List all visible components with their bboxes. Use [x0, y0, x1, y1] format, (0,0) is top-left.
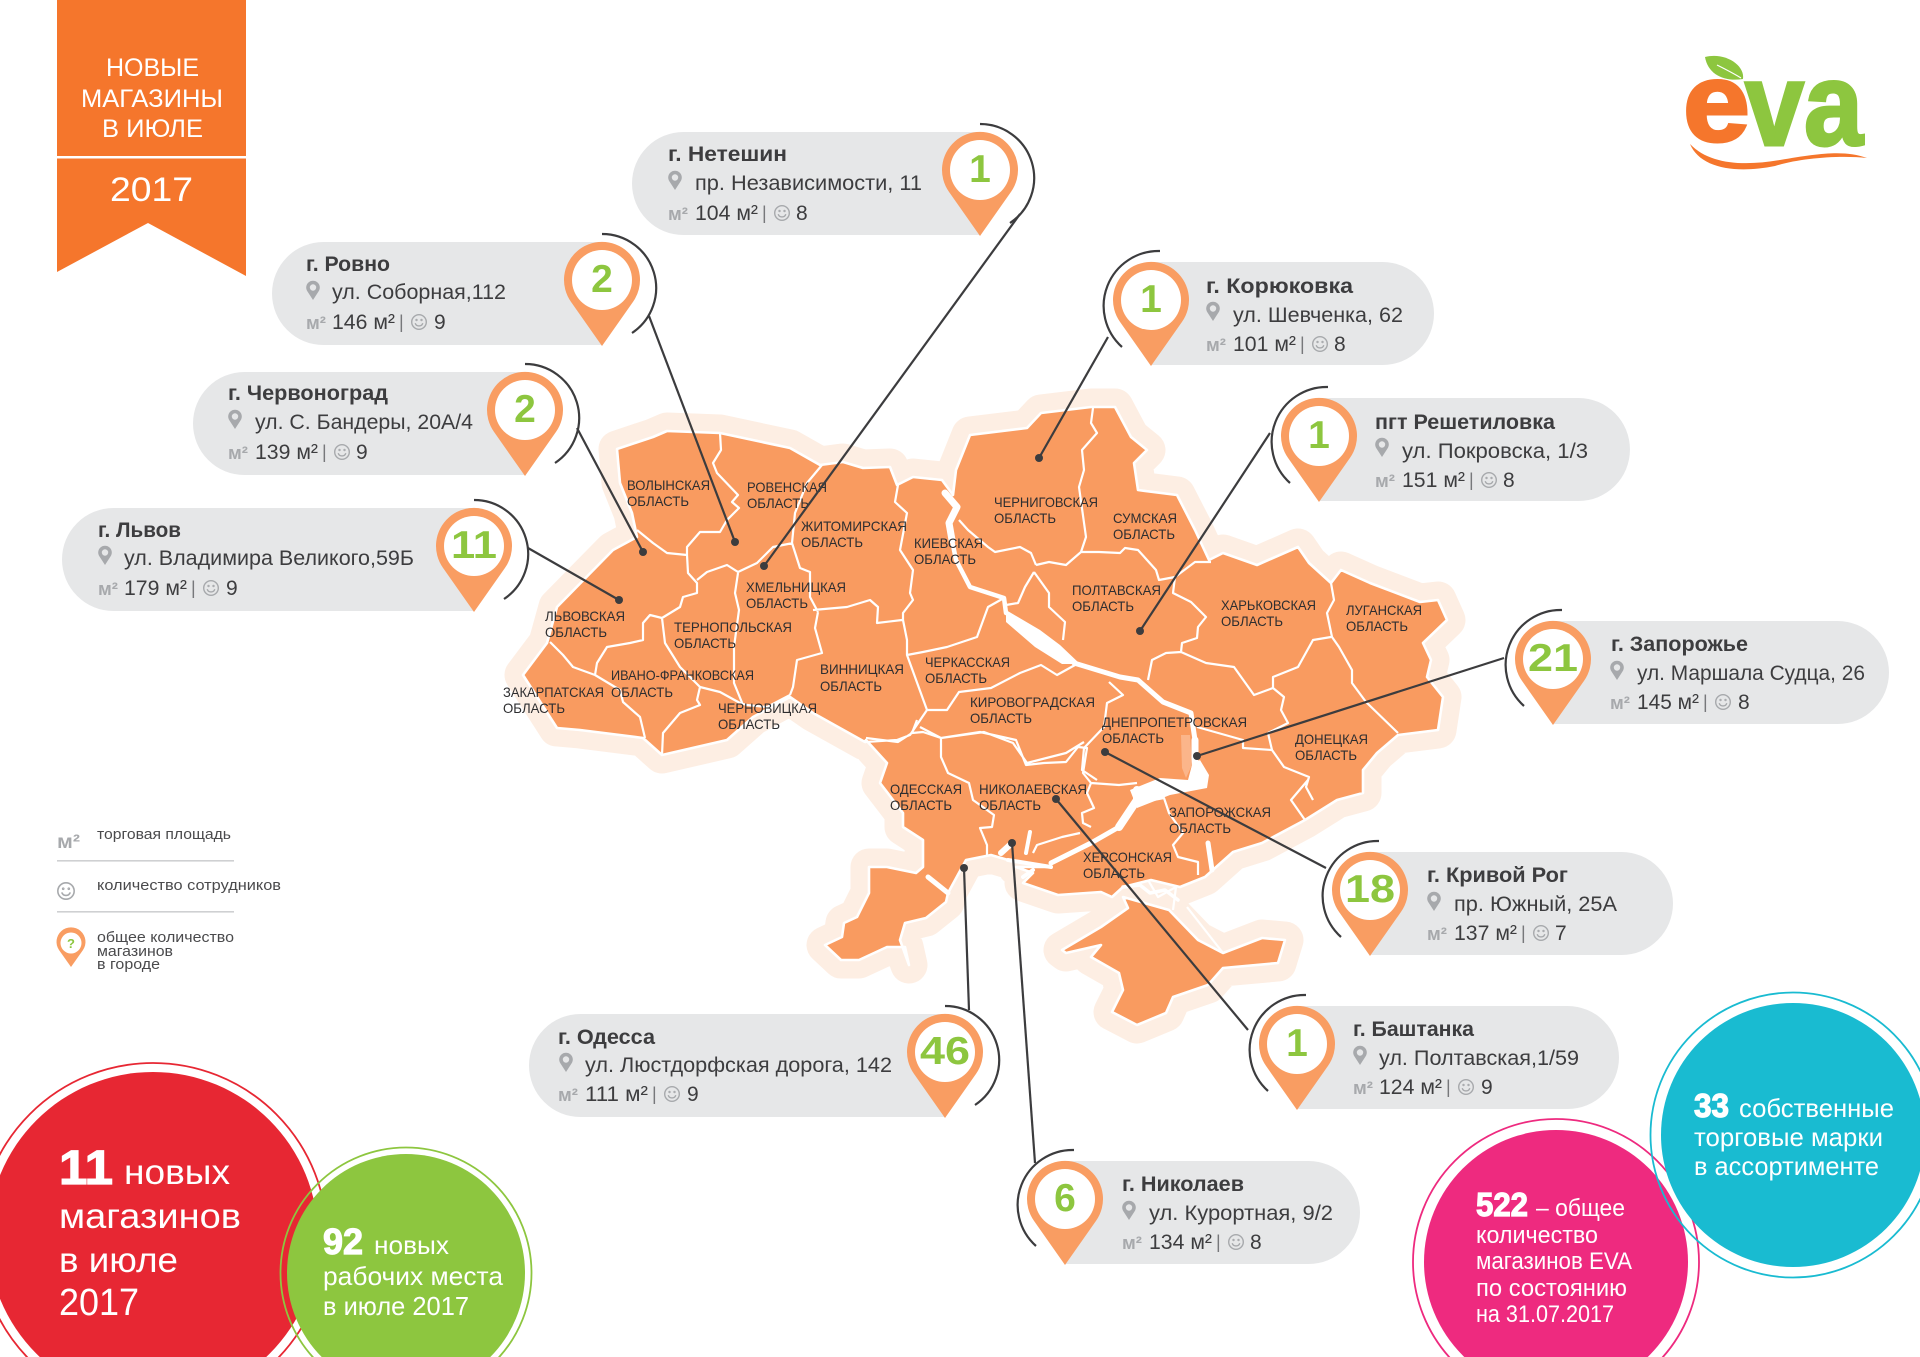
card: г. Николаев: |	[1216, 1232, 1221, 1252]
label: Закарпатская	[503, 684, 604, 716]
card: пгт Решетиловка	[1272, 387, 1630, 502]
label: Тернопольская: ТЕРНОПОЛЬСКАЯ	[674, 619, 792, 635]
label: Херсонская: ХЕРСОНСКАЯ	[1083, 849, 1172, 865]
legend: stores: магазинов	[97, 943, 173, 960]
label: Ивано-Франковская: ОБЛАСТЬ	[611, 684, 673, 700]
card: г. Корюковка: г. Корюковка	[1206, 275, 1353, 298]
label: Ровенская: ОБЛАСТЬ	[747, 495, 809, 511]
card: г. Ровно	[272, 234, 656, 346]
label: Винницкая: ОБЛАСТЬ	[820, 678, 882, 694]
legend: staff: количество сотрудников	[97, 877, 281, 894]
card: г. Одесса: |	[652, 1084, 657, 1104]
card: г. Корюковка: 101 м²	[1233, 333, 1296, 356]
oblast borders	[550, 408, 1398, 953]
circle: 33 own brands	[1650, 992, 1920, 1278]
card: г. Львов	[62, 500, 528, 612]
legend: stores: ?	[67, 936, 75, 951]
card: г. Баштанка: 9	[1481, 1076, 1493, 1099]
legend: area: м²	[57, 832, 80, 853]
card: г. Нетешин	[632, 124, 1034, 236]
circle: 33 own brands: собственные	[1739, 1093, 1894, 1123]
label: Днепропетровская: ОБЛАСТЬ	[1102, 730, 1164, 746]
label: Хмельницкая: ОБЛАСТЬ	[746, 595, 808, 611]
label: Кировоградская: КИРОВОГРАДСКАЯ	[970, 694, 1095, 710]
card: г. Червоноград	[193, 364, 579, 476]
card: г. Одесса: 9	[687, 1083, 699, 1106]
card: г. Одесса: г. Одесса	[558, 1026, 655, 1049]
label: Житомирская: ОБЛАСТЬ	[801, 534, 863, 550]
card: г. Нетешин: пр. Независимости, 11	[695, 172, 922, 195]
card: г. Запорожье: 21	[1528, 637, 1578, 680]
ribbon: title banner: В ИЮЛЕ	[102, 115, 203, 143]
label: Киевская: ОБЛАСТЬ	[914, 551, 976, 567]
legend: staff	[58, 877, 281, 899]
circle: 522 stores total: 522	[1476, 1186, 1528, 1223]
card: г. Кривой Рог: пр. Южный, 25А	[1454, 893, 1617, 916]
label: Хмельницкая	[746, 579, 846, 611]
card: г. Запорожье	[1506, 610, 1889, 725]
label: Николаевская: ОБЛАСТЬ	[979, 797, 1041, 813]
label: Закарпатская: ОБЛАСТЬ	[503, 700, 565, 716]
circle: 92 new jobs: 92	[323, 1221, 363, 1262]
circle: 522 stores total: по состоянию	[1476, 1275, 1627, 1302]
card: г. Кривой Рог: 7	[1555, 922, 1567, 945]
label: Ивано-Франковская: ИВАНО-ФРАНКОВСКАЯ	[611, 667, 754, 683]
reservoirs filled	[1006, 610, 1209, 808]
card: г. Корюковка	[1104, 251, 1434, 366]
card: г. Баштанка: м²	[1353, 1078, 1373, 1098]
card: г. Николаев: г. Николаев	[1122, 1173, 1244, 1196]
label: Закарпатская: ЗАКАРПАТСКАЯ	[503, 684, 604, 700]
card: г. Корюковка: м²	[1206, 335, 1226, 355]
label: Харьковская: ХАРЬКОВСКАЯ	[1221, 597, 1316, 613]
label: Черниговская: ЧЕРНИГОВСКАЯ	[994, 494, 1098, 510]
card: пгт Решетиловка: |	[1469, 470, 1474, 490]
label: Ровенская: РОВЕНСКАЯ	[747, 479, 827, 495]
circle: 92 new jobs	[280, 1148, 532, 1357]
card: г. Нетешин: 1	[969, 148, 991, 191]
card: г. Корюковка: 8	[1334, 333, 1346, 356]
card: г. Нетешин: 8	[796, 202, 808, 225]
label: Днепропетровская	[1102, 714, 1247, 746]
label: Херсонская	[1083, 849, 1172, 881]
card: г. Львов: 179 м²	[124, 577, 187, 600]
card: г. Одесса: ул. Люстдорфская дорога, 142	[585, 1054, 892, 1077]
label: Луганская: ОБЛАСТЬ	[1346, 618, 1408, 634]
oblast labels	[503, 477, 1422, 881]
circle: 522 stores total	[1413, 1119, 1699, 1357]
label: Львовская	[545, 608, 625, 640]
card: г. Баштанка	[1250, 995, 1619, 1110]
card: г. Львов: г. Львов	[98, 519, 181, 542]
card: пгт Решетиловка: м²	[1375, 471, 1395, 491]
circle: 522 stores total: – общее	[1536, 1195, 1625, 1222]
card: г. Червоноград: 139 м²	[255, 441, 318, 464]
label: Луганская	[1346, 602, 1422, 634]
card: г. Одесса: 46	[920, 1030, 970, 1073]
label: Черниговская: ОБЛАСТЬ	[994, 510, 1056, 526]
ribbon: title banner: МАГАЗИНЫ	[81, 85, 223, 113]
label: Запорожская	[1169, 804, 1271, 836]
card: г. Ровно: |	[399, 312, 404, 332]
circle: 11 new stores: магазинов	[59, 1197, 241, 1236]
legend: stores	[56, 927, 234, 973]
card: г. Запорожье: ул. Маршала Судца, 26	[1637, 662, 1865, 685]
card: г. Баштанка: ул. Полтавская,1/59	[1379, 1047, 1579, 1070]
circle: 33 own brands: торговые марки	[1694, 1122, 1883, 1152]
label: Черновицкая: ЧЕРНОВИЦКАЯ	[718, 700, 817, 716]
label: Николаевская	[979, 781, 1087, 813]
map halo	[523, 407, 1447, 1025]
label: Донецкая: ДОНЕЦКАЯ	[1295, 731, 1368, 747]
label: Одесская: ОБЛАСТЬ	[890, 797, 952, 813]
label: Черновицкая	[718, 700, 817, 732]
map territory	[523, 407, 1447, 1025]
card: г. Ровно: 9	[434, 311, 446, 334]
card: г. Ровно: м²	[306, 313, 326, 333]
ribbon: title banner: НОВЫЕ	[106, 54, 199, 82]
card: г. Нетешин: г. Нетешин	[668, 143, 787, 166]
legend: stores: общее количество	[97, 929, 234, 946]
card: г. Нетешин: 104 м²	[695, 202, 758, 225]
card: г. Ровно: ул. Соборная,112	[332, 281, 506, 304]
map: Ukraine oblasts	[523, 407, 1447, 1025]
label: Запорожская: ОБЛАСТЬ	[1169, 820, 1231, 836]
card: г. Кривой Рог: м²	[1427, 924, 1447, 944]
card: г. Николаев: ул. Курортная, 9/2	[1149, 1202, 1333, 1225]
card: г. Червоноград: 9	[356, 441, 368, 464]
label: Николаевская: НИКОЛАЕВСКАЯ	[979, 781, 1087, 797]
circle: 33 own brands: в ассортименте	[1694, 1151, 1879, 1181]
circle: 522 stores total: на 31.07.2017	[1476, 1301, 1614, 1328]
card: г. Баштанка: 124 м²	[1379, 1076, 1442, 1099]
card: г. Николаев	[1018, 1150, 1360, 1265]
label: Полтавская	[1072, 582, 1161, 614]
card: г. Кривой Рог: г. Кривой Рог	[1427, 864, 1568, 887]
card: г. Корюковка: ул. Шевченка, 62	[1233, 304, 1403, 327]
card: пгт Решетиловка: ул. Покровска, 1/3	[1402, 440, 1588, 463]
circle: 522 stores total: количество	[1476, 1222, 1598, 1249]
label: Луганская: ЛУГАНСКАЯ	[1346, 602, 1422, 618]
legend: stores: в городе	[97, 956, 160, 973]
label: Харьковская: ОБЛАСТЬ	[1221, 613, 1283, 629]
circle: 92 new jobs: новых	[374, 1230, 449, 1260]
label: Киевская	[914, 535, 983, 567]
logo: EVA	[1683, 39, 1867, 171]
logo: EVA: e	[1683, 40, 1750, 165]
card: пгт Решетиловка: пгт Решетиловка	[1375, 411, 1555, 434]
card: г. Николаев: м²	[1122, 1233, 1142, 1253]
card: г. Львов: |	[191, 578, 196, 598]
label: Житомирская: ЖИТОМИРСКАЯ	[801, 518, 907, 534]
card: г. Ровно: 2	[591, 258, 613, 301]
circle: 33 own brands: 33	[1694, 1087, 1729, 1124]
label: Одесская: ОДЕССКАЯ	[890, 781, 962, 797]
label: Одесская	[890, 781, 962, 813]
card: г. Кривой Рог	[1323, 841, 1673, 956]
card: г. Николаев: 8	[1250, 1231, 1262, 1254]
card: г. Червоноград: м²	[228, 443, 248, 463]
label: Сумская: ОБЛАСТЬ	[1113, 526, 1175, 542]
card: г. Львов: ул. Владимира Великого,59Б	[124, 547, 414, 570]
label: Черкасская: ОБЛАСТЬ	[925, 670, 987, 686]
label: Тернопольская: ОБЛАСТЬ	[674, 635, 736, 651]
card: г. Николаев: 6	[1054, 1177, 1076, 1220]
circle: 11 new stores	[0, 1063, 327, 1357]
card: г. Запорожье: м²	[1610, 693, 1630, 713]
label: Киевская: КИЕВСКАЯ	[914, 535, 983, 551]
island	[1181, 735, 1192, 778]
label: Житомирская	[801, 518, 907, 550]
card: г. Корюковка: 1	[1140, 278, 1162, 321]
card: г. Львов: м²	[98, 579, 118, 599]
circle: 11 new stores: 2017	[59, 1282, 139, 1324]
card: г. Червоноград: |	[322, 442, 327, 462]
card: г. Баштанка: 1	[1286, 1022, 1308, 1065]
circle: 11 new stores: 11	[59, 1142, 113, 1195]
card: г. Баштанка: |	[1446, 1077, 1451, 1097]
label: Винницкая: ВИННИЦКАЯ	[820, 661, 904, 677]
card: пгт Решетиловка: 8	[1503, 469, 1515, 492]
circle: 11 new stores: в июле	[59, 1241, 178, 1280]
label: Ровенская	[747, 479, 827, 511]
label: Полтавская: ОБЛАСТЬ	[1072, 598, 1134, 614]
card: г. Одесса: 111 м²	[585, 1083, 648, 1106]
circle: 522 stores total: магазинов EVA	[1476, 1248, 1632, 1275]
card: г. Ровно: 146 м²	[332, 311, 395, 334]
card: г. Баштанка: г. Баштанка	[1353, 1018, 1474, 1041]
legend: area: торговая площадь	[97, 826, 231, 843]
leader lines and city dots	[528, 214, 1504, 1163]
card: пгт Решетиловка: 1	[1308, 414, 1330, 457]
card: г. Червоноград: 2	[514, 388, 536, 431]
circle: 11 new stores: новых	[124, 1153, 231, 1192]
card: г. Одесса	[529, 1006, 999, 1118]
label: Херсонская: ОБЛАСТЬ	[1083, 865, 1145, 881]
label: Харьковская	[1221, 597, 1316, 629]
label: Полтавская: ПОЛТАВСКАЯ	[1072, 582, 1161, 598]
label: Ивано-Франковская	[611, 667, 754, 700]
circle: 92 new jobs: рабочих места	[323, 1261, 504, 1291]
label: Донецкая: ОБЛАСТЬ	[1295, 747, 1357, 763]
legend: area	[57, 826, 231, 853]
card: г. Нетешин: м²	[668, 204, 688, 224]
label: Запорожская: ЗАПОРОЖСКАЯ	[1169, 804, 1271, 820]
card: г. Львов: 9	[226, 577, 238, 600]
card: г. Запорожье: г. Запорожье	[1611, 633, 1748, 656]
ribbon: title banner	[57, 0, 246, 276]
label: Кировоградская	[970, 694, 1095, 726]
label: Волынская: ОБЛАСТЬ	[627, 493, 689, 509]
label: Черниговская	[994, 494, 1098, 526]
card: г. Червоноград: ул. С. Бандеры, 20А/4	[255, 411, 473, 434]
label: Львовская: ОБЛАСТЬ	[545, 624, 607, 640]
label: Кировоградская: ОБЛАСТЬ	[970, 710, 1032, 726]
card: г. Кривой Рог: 18	[1345, 868, 1395, 911]
card: г. Запорожье: |	[1703, 692, 1708, 712]
logo: EVA: va	[1745, 39, 1864, 171]
label: Волынская	[627, 477, 710, 509]
label: Волынская: ВОЛЫНСКАЯ	[627, 477, 710, 493]
card: г. Запорожье: 8	[1738, 691, 1750, 714]
card: г. Одесса: м²	[558, 1085, 578, 1105]
label: Сумская	[1113, 510, 1177, 542]
label: Днепропетровская: ДНЕПРОПЕТРОВСКАЯ	[1102, 714, 1247, 730]
card: пгт Решетиловка: 151 м²	[1402, 469, 1465, 492]
card: г. Кривой Рог: 137 м²	[1454, 922, 1517, 945]
label: Донецкая	[1295, 731, 1368, 763]
card: г. Николаев: 134 м²	[1149, 1231, 1212, 1254]
ribbon: title banner: 2017	[110, 171, 193, 209]
label: Львовская: ЛЬВОВСКАЯ	[545, 608, 625, 624]
card: г. Львов: 11	[451, 524, 497, 567]
label: Винницкая	[820, 661, 904, 694]
Dnieper river and reservoirs	[928, 493, 1212, 900]
card: г. Ровно: г. Ровно	[306, 253, 390, 276]
legend	[56, 826, 281, 973]
card: г. Червоноград: г. Червоноград	[228, 382, 388, 405]
label: Сумская: СУМСКАЯ	[1113, 510, 1177, 526]
card: г. Кривой Рог: |	[1521, 923, 1526, 943]
card: г. Запорожье: 145 м²	[1637, 691, 1699, 714]
label: Хмельницкая: ХМЕЛЬНИЦКАЯ	[746, 579, 846, 595]
label: Тернопольская	[674, 619, 792, 651]
label: Черкасская: ЧЕРКАССКАЯ	[925, 654, 1010, 670]
card: г. Нетешин: |	[762, 203, 767, 223]
label: Черкасская	[925, 654, 1010, 686]
label: Черновицкая: ОБЛАСТЬ	[718, 716, 780, 732]
circle: 92 new jobs: в июле 2017	[323, 1291, 469, 1321]
card: г. Корюковка: |	[1300, 334, 1305, 354]
